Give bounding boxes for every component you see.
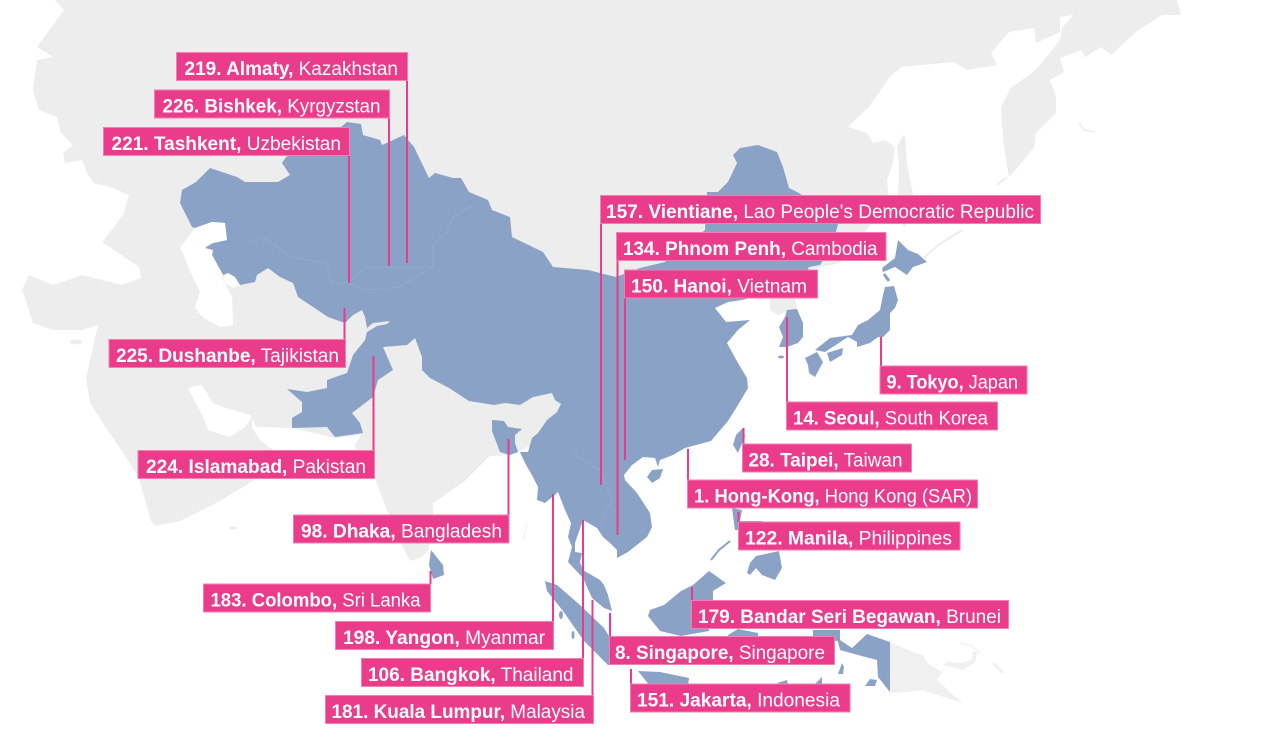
label: Bishkek: 226. Bishkek, Kyrgyzstan [162,96,380,118]
label: Tashkent [104,128,350,283]
label: Dushanbe [109,308,346,368]
label: Hanoi: 150. Hanoi, Vietnam [631,276,807,298]
map: highlighted countries in blue [180,122,927,692]
label: Tashkent: 221. Tashkent, Uzbekistan [112,134,341,155]
label: Colombo [204,571,432,612]
label: Hong-Kong: 1. Hong-Kong, Hong Kong (SAR) [694,486,972,508]
label: Bandar Seri Begawan [691,587,1008,628]
label: Seoul [786,317,998,430]
label: Vientiane: 157. Vientiane, Lao People's Democratic Republic [606,202,1034,223]
label: Tokyo: 9. Tokyo, Japan [886,372,1018,394]
label: Jakarta: 151. Jakarta, Indonesia [637,690,840,712]
label: Kuala Lumpur: 181. Kuala Lumpur, Malaysia [332,702,585,723]
label: Hanoi [624,270,818,460]
label: Phnom Penh: 134. Phnom Penh, Cambodia [623,239,878,260]
label: Kuala Lumpur [326,600,594,724]
label: Yangon [336,494,554,650]
label: Singapore [609,613,834,664]
label: Bandar Seri Begawan: 179. Bandar Seri Begawan, Brunei [698,607,1001,628]
label: Manila [738,512,960,550]
label: Tokyo [880,337,1027,394]
label: Jakarta [630,669,850,712]
label: Colombo: 183. Colombo, Sri Lanka [210,590,421,612]
label: Islamabad [138,356,374,478]
label: Hong-Kong [687,449,978,508]
label: Bangkok: 106. Bangkok, Thailand [368,665,574,686]
label: Dhaka [294,439,510,543]
label: Taipei: 28. Taipei, Taiwan [748,450,902,472]
label: Vientiane [600,196,1040,485]
label: Taipei [742,428,912,472]
label: Almaty: 219. Almaty, Kazakhstan [184,59,398,80]
map: inland seas [180,222,240,327]
label: Dhaka: 98. Dhaka, Bangladesh [301,522,502,542]
label: Phnom Penh [616,232,886,535]
label: Manila: 122. Manila, Philippines [745,528,952,550]
label: Singapore: 8. Singapore, Singapore [615,643,825,664]
label: Yangon: 198. Yangon, Myanmar [343,628,546,649]
label: Seoul: 14. Seoul, South Korea [793,408,988,430]
label: Bishkek [154,90,390,266]
label: Dushanbe: 225. Dushanbe, Tajikistan [116,346,339,367]
label: Almaty [176,52,408,263]
label: Islamabad: 224. Islamabad, Pakistan [146,457,366,478]
label: Bangkok [362,520,584,686]
